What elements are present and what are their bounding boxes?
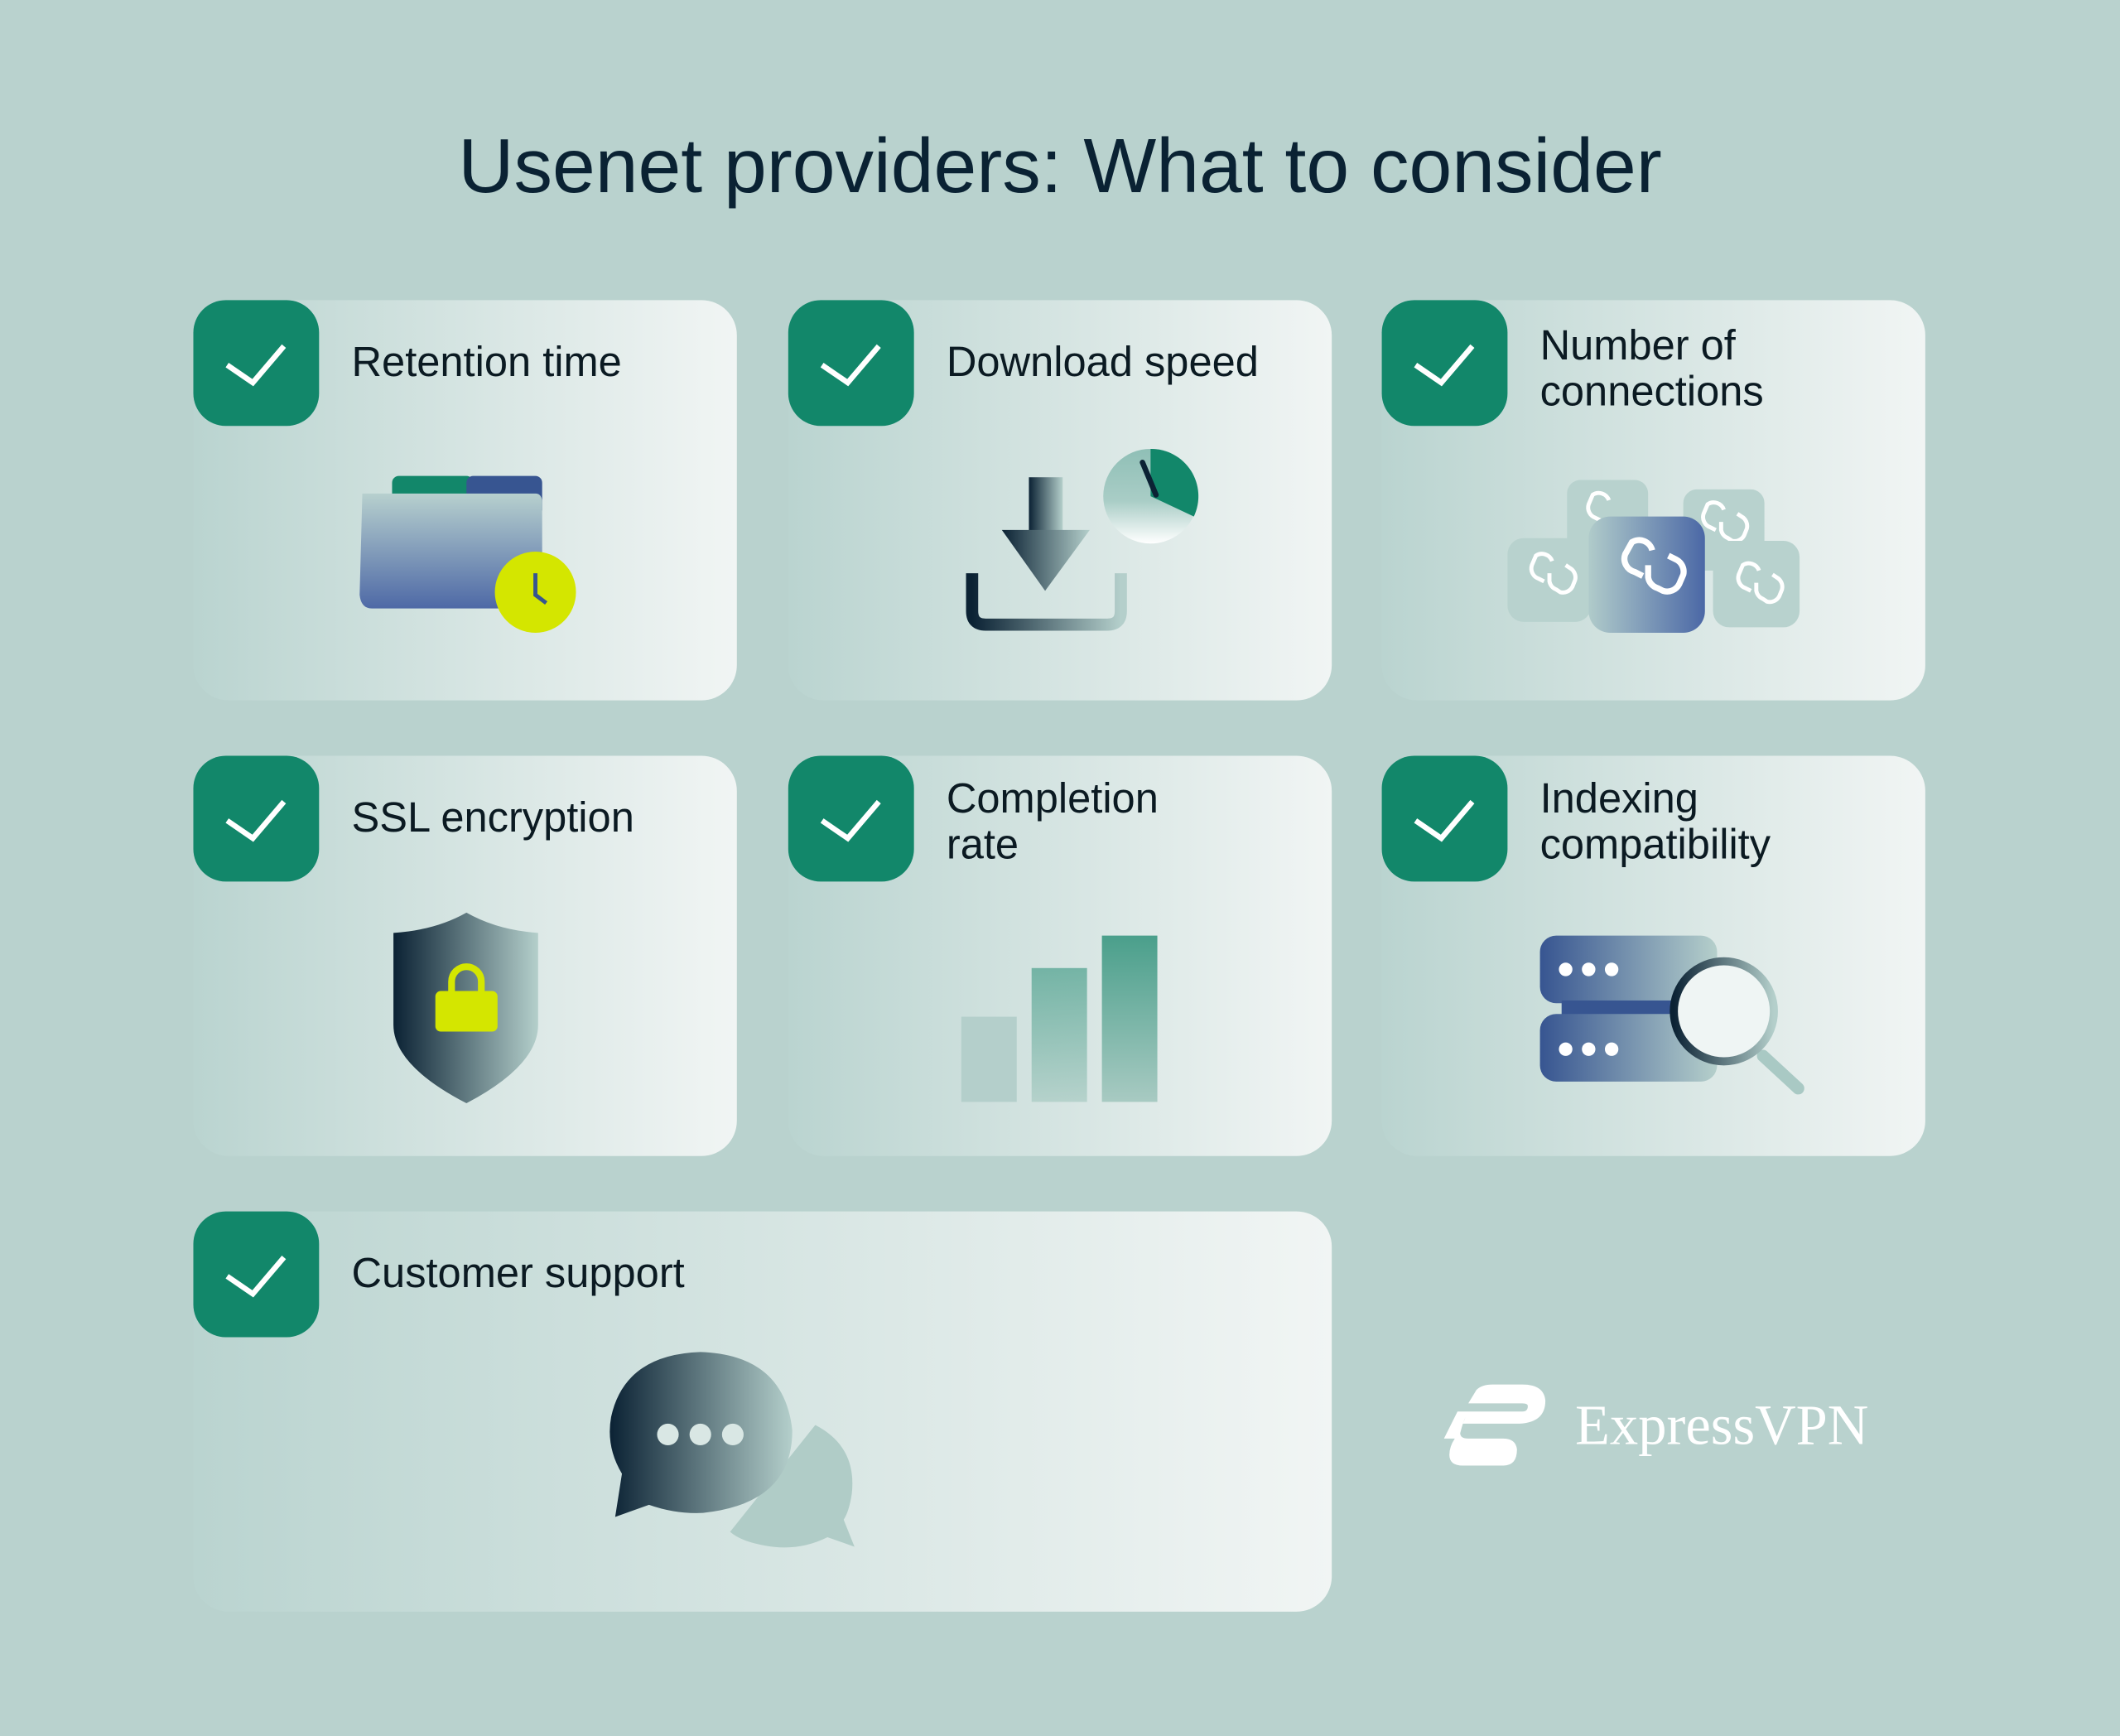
panel: indexing compatibility bbox=[1382, 756, 1925, 1156]
label: customer support: Customer support bbox=[351, 1249, 685, 1296]
label: completion rate: rate bbox=[947, 821, 1019, 868]
title: Usenet providers: What to consider bbox=[458, 123, 1662, 210]
panel: number of connections bbox=[1382, 300, 1925, 701]
panel: customer support bbox=[193, 1212, 1332, 1612]
panel: ssl encryption bbox=[193, 756, 737, 1156]
label: number of connections bbox=[1540, 322, 1764, 415]
label: download speed: Download speed bbox=[947, 338, 1259, 385]
icon: server with magnifier bbox=[1540, 936, 1804, 1095]
icon: download with speed clock bbox=[966, 449, 1199, 631]
label: retention time: Retention time bbox=[351, 338, 622, 385]
icon: logo mark bbox=[1444, 1385, 1545, 1466]
panel: completion rate bbox=[788, 756, 1332, 1156]
text: brand name: ExpressVPN bbox=[1575, 1396, 1868, 1458]
label: number of connections: connections bbox=[1540, 368, 1764, 415]
icon: check bbox=[1382, 300, 1507, 426]
panel: download speed bbox=[788, 300, 1332, 701]
label: completion rate: Completion bbox=[947, 774, 1159, 822]
icon: check bbox=[788, 756, 914, 881]
label: completion rate bbox=[947, 774, 1159, 868]
icon: check bbox=[193, 1212, 319, 1337]
icon: check bbox=[193, 300, 319, 426]
panel: retention time bbox=[193, 300, 737, 701]
chart: bars bbox=[961, 936, 1158, 1102]
icon: check bbox=[193, 756, 319, 881]
logo: expressvpn bbox=[1444, 1385, 1868, 1466]
label: indexing compatibility: Indexing bbox=[1540, 774, 1698, 822]
icon: folder with clock bbox=[359, 475, 576, 633]
label: number of connections: Number of bbox=[1540, 322, 1736, 369]
label: ssl encryption: SSL encryption bbox=[351, 793, 634, 841]
label: indexing compatibility bbox=[1540, 774, 1771, 868]
label: indexing compatibility: compatibility bbox=[1540, 821, 1771, 868]
icon: link tiles bbox=[1507, 480, 1800, 633]
icon: check bbox=[788, 300, 914, 426]
icon: chat bubbles bbox=[610, 1352, 855, 1547]
icon: check bbox=[1382, 756, 1507, 881]
icon: shield with lock bbox=[393, 913, 538, 1103]
